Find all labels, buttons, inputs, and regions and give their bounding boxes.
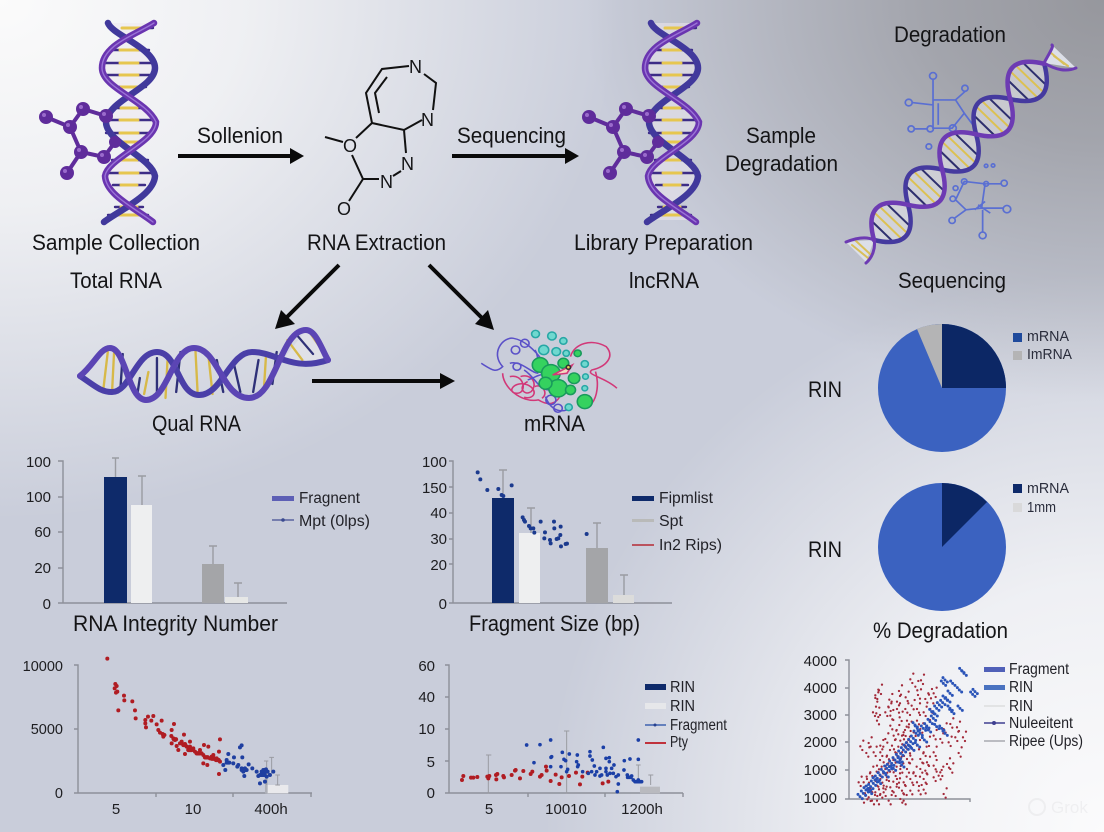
icon: chemical structure: O <box>343 136 357 156</box>
legend: chart 2 <box>632 490 722 554</box>
bar chart with scatter: fragment size: 40 <box>430 505 447 522</box>
scatter chart: lower left: 5000 <box>31 722 63 738</box>
icon: purple molecule, sample collection <box>39 102 121 180</box>
legend: chart 5: Ripee (Ups) <box>1009 733 1083 750</box>
bar chart: RNA integrity number: 20 <box>34 560 51 577</box>
pie chart: RIN bottom <box>878 483 1006 611</box>
scatter chart: lower right: 2000 <box>804 734 837 751</box>
legend: chart 2: Spt <box>659 513 684 530</box>
legend: chart 5 <box>984 661 1083 750</box>
icon: blue molecular fragments <box>905 73 1011 239</box>
watermark: Grok: Grok <box>1051 798 1088 817</box>
scatter chart: lower middle: 0 <box>427 785 435 802</box>
scatter chart: lower right: 4000 <box>804 653 837 670</box>
icon: horizontal DNA helix <box>80 330 328 400</box>
legend: bottom pie: 1mm <box>1027 500 1056 516</box>
legend: chart 1: Mpt (0lps) <box>299 513 370 530</box>
label: Sample Degradation: Sample <box>746 123 816 148</box>
label: Sample Degradation <box>725 123 838 176</box>
icon: diagonal DNA helix <box>846 45 1076 263</box>
label: Sample Collection: Sample Collection <box>32 230 200 255</box>
legend: top pie <box>1013 329 1072 363</box>
bar chart with scatter: fragment size: 150 <box>422 480 447 497</box>
bar chart with scatter: fragment size <box>422 454 672 613</box>
label: Total RNA: Total RNA <box>70 268 162 293</box>
bar chart with scatter: fragment size: 30 <box>430 531 447 548</box>
label: Degradation heading: Degradation <box>894 22 1006 47</box>
label: RIN, top pie: RIN <box>808 377 842 402</box>
icon: chemical structure <box>325 57 436 219</box>
legend: chart 5: RIN <box>1009 679 1033 696</box>
scatter chart: lower middle: 60 <box>418 658 435 675</box>
arrow: Qual RNA to mRNA <box>312 373 455 389</box>
legend: chart 1 <box>272 490 370 530</box>
icon: chemical structure: N <box>409 57 422 77</box>
scatter chart: lower middle <box>418 658 683 818</box>
scatter chart: lower right <box>804 653 977 807</box>
scatter chart: lower middle: 5 <box>427 754 435 771</box>
arrow: extraction to Qual RNA <box>275 265 339 329</box>
label: Sollenion: Sollenion <box>197 123 283 148</box>
legend: chart 4: RIN <box>670 679 695 696</box>
icon: chemical structure: N <box>401 154 414 174</box>
label: Sequencing: Sequencing <box>898 268 1006 293</box>
bar chart with scatter: fragment size: 0 <box>439 596 447 613</box>
legend: top pie: mRNA <box>1027 329 1069 345</box>
icon: chemical structure: N <box>380 172 393 192</box>
icon: chemical structure: N <box>421 110 434 130</box>
arrow: collection to extraction <box>178 148 304 164</box>
axis title: RNA Integrity Number: RNA Integrity Number <box>73 611 278 636</box>
arrow: extraction to mRNA <box>429 265 494 330</box>
icon: mRNA tangled structure <box>481 330 617 412</box>
icon: chemical structure: O <box>337 199 351 219</box>
legend: bottom pie <box>1013 481 1069 516</box>
scatter chart: lower right: 1000 <box>804 762 837 779</box>
icon: vertical DNA helix and molecule, library preparation <box>582 23 699 222</box>
scatter chart: lower middle: 10010 <box>545 801 587 818</box>
bar chart with scatter: fragment size: 100 <box>422 454 447 471</box>
scatter chart: lower left <box>23 659 312 818</box>
legend: chart 4: RIN <box>670 698 695 715</box>
legend: chart 2: In2 Rips) <box>659 537 722 554</box>
scatter chart: lower left: 0 <box>55 786 63 802</box>
legend: chart 5: Fragment <box>1009 661 1070 678</box>
bar chart: RNA integrity number <box>26 454 287 613</box>
legend: chart 5: RIN <box>1009 698 1033 715</box>
scatter chart: lower left: 5 <box>112 801 120 818</box>
bar chart: RNA integrity number: 100 <box>26 489 51 506</box>
bar chart with scatter: fragment size: 20 <box>430 557 447 574</box>
label: lncRNA: lncRNA <box>629 268 699 293</box>
scatter chart: lower middle: 40 <box>418 689 435 706</box>
watermark: Grok <box>1029 798 1088 817</box>
bar chart: RNA integrity number: 100 <box>26 454 51 471</box>
scatter chart: lower left: 10000 <box>23 659 63 675</box>
label: Library Preparation: Library Preparation <box>574 230 753 255</box>
label: RIN, bottom pie: RIN <box>808 537 842 562</box>
label: Sample Degradation: Degradation <box>725 151 838 176</box>
legend: chart 5: Nuleeitent <box>1009 715 1074 732</box>
axis title: Fragment Size (bp): Fragment Size (bp) <box>469 611 640 636</box>
label: RNA Extraction: RNA Extraction <box>307 230 446 255</box>
scatter chart: lower right: 3000 <box>804 707 837 724</box>
arrow: extraction to library <box>452 148 579 164</box>
legend: chart 2: Fipmlist <box>659 490 714 507</box>
scatter chart: lower right: 4000 <box>804 680 837 697</box>
scatter chart: lower middle: 10 <box>418 721 435 738</box>
label: mRNA: mRNA <box>524 411 585 436</box>
scatter chart: lower middle: 1200h <box>621 801 663 818</box>
legend: chart 4: Pty <box>670 734 688 751</box>
scatter chart: lower left: 400h <box>254 801 288 818</box>
legend: chart 4: Fragment <box>670 717 728 734</box>
icon: vertical DNA helix, sample collection <box>102 23 156 222</box>
bar chart: RNA integrity number: 0 <box>43 596 51 613</box>
scatter chart: lower middle: 5 <box>485 801 493 818</box>
legend: chart 4 <box>645 679 728 751</box>
legend: chart 1: Fragnent <box>299 490 361 507</box>
bar chart: RNA integrity number: 60 <box>34 524 51 541</box>
legend: top pie: ImRNA <box>1027 347 1072 363</box>
label: Sequencing arrow text: Sequencing <box>457 123 566 148</box>
label: Qual RNA: Qual RNA <box>152 411 241 436</box>
pie chart: RIN top <box>878 324 1006 452</box>
scatter chart: lower right: 1000 <box>804 790 837 807</box>
label: % Degradation: % Degradation <box>873 618 1008 643</box>
legend: bottom pie: mRNA <box>1027 481 1069 497</box>
scatter chart: lower left: 10 <box>185 801 201 818</box>
